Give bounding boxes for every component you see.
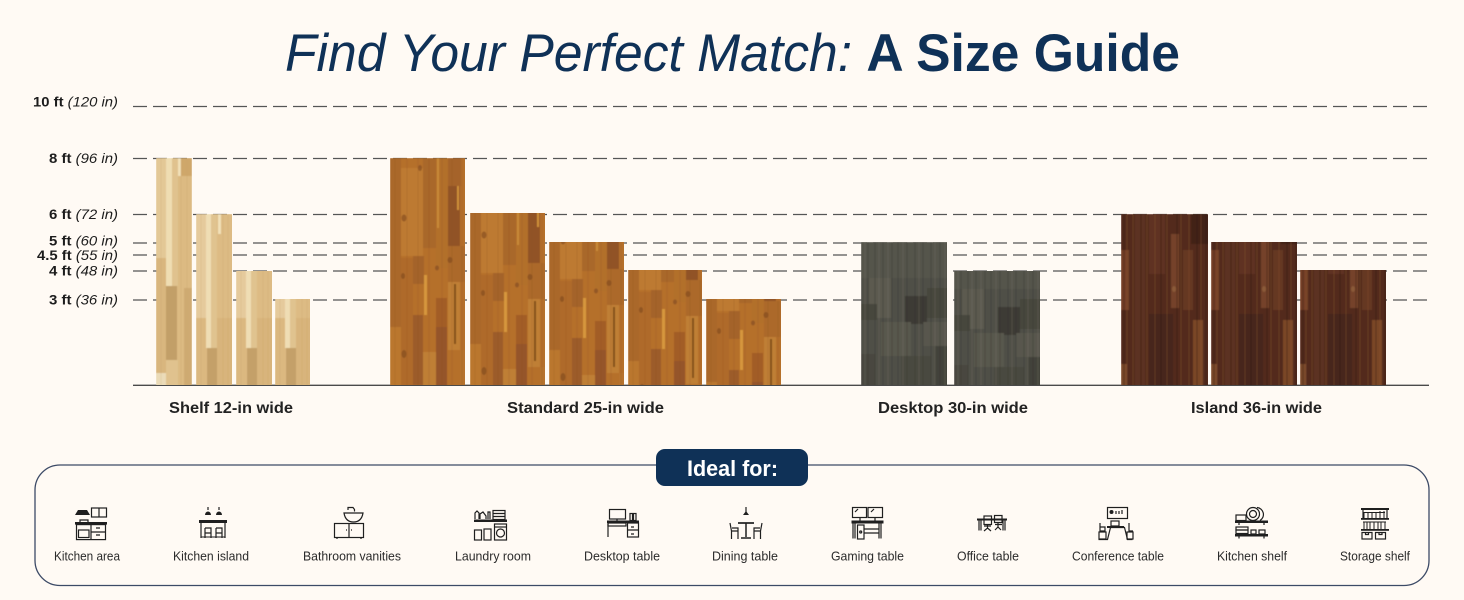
board: shelf 6 ft [196, 214, 232, 385]
height axis labels: 5 ft (60 in) [49, 232, 118, 248]
group: desktop boards [861, 242, 1042, 397]
board: shelf 3 ft [275, 299, 310, 385]
height axis labels: 4.5 ft (55 in) [37, 247, 118, 263]
item: kitchen shelf: Kitchen shelf [1217, 550, 1288, 564]
panel: ideal for [35, 449, 1429, 586]
group: standard boards [390, 158, 782, 441]
item: conference table [1072, 508, 1164, 564]
category labels: Shelf 12-in wide [169, 400, 293, 417]
badge: ideal for: Ideal for: [687, 456, 778, 481]
item: storage shelf: Storage shelf [1340, 550, 1410, 564]
item: conference table: Conference table [1072, 550, 1164, 564]
board: desktop 4 ft [954, 271, 1040, 385]
item: desktop table: Desktop table [584, 550, 660, 564]
title: Find Your Perfect Match: A Size Guide [285, 24, 1180, 83]
group: island boards [1121, 214, 1388, 386]
item: desktop table [584, 510, 660, 564]
item: dining table [712, 507, 778, 564]
board: standard 3 ft [706, 299, 781, 385]
height axis labels: 8 ft (96 in) [49, 150, 118, 166]
category labels: Standard 25-in wide [507, 400, 664, 417]
group: shelf boards [156, 158, 312, 386]
height axis labels: 4 ft (48 in) [49, 262, 118, 278]
item: bathroom vanities: Bathroom vanities [303, 550, 401, 564]
height chart [33, 94, 1430, 441]
item: storage shelf [1340, 508, 1410, 564]
board: island 5 ft [1211, 242, 1297, 385]
height axis labels [33, 94, 118, 308]
board: shelf 8 ft [156, 158, 192, 385]
item: office table: Office table [957, 550, 1019, 564]
board: island 4 ft [1300, 270, 1386, 385]
board: desktop 5 ft [861, 242, 947, 385]
item: kitchen shelf [1217, 508, 1288, 564]
board: shelf 4 ft [236, 271, 272, 385]
item: office table [957, 516, 1019, 564]
board: standard 6 ft [470, 213, 545, 385]
board: island 6 ft [1121, 214, 1208, 385]
board: standard 8 ft [390, 158, 465, 385]
item: kitchen island: Kitchen island [173, 550, 249, 564]
item: kitchen island [173, 507, 249, 564]
height axis labels: 6 ft (72 in) [49, 206, 118, 222]
item: gaming table [831, 508, 904, 564]
item: laundry room: Laundry room [455, 550, 531, 564]
category labels: Desktop 30-in wide [878, 400, 1028, 417]
item: dining table: Dining table [712, 550, 778, 564]
height axis labels: 3 ft (36 in) [49, 292, 118, 308]
item: laundry room [455, 510, 531, 564]
item: gaming table: Gaming table [831, 550, 904, 564]
board: standard 4 ft [628, 270, 702, 385]
item: kitchen area [54, 508, 120, 564]
category labels: Island 36-in wide [1191, 400, 1322, 417]
item: kitchen area: Kitchen area [54, 550, 120, 564]
board: standard 5 ft [549, 242, 624, 385]
category labels [169, 400, 1322, 417]
item: bathroom vanities [303, 508, 401, 564]
badge: ideal for [656, 449, 808, 486]
height axis labels: 10 ft (120 in) [33, 94, 118, 110]
